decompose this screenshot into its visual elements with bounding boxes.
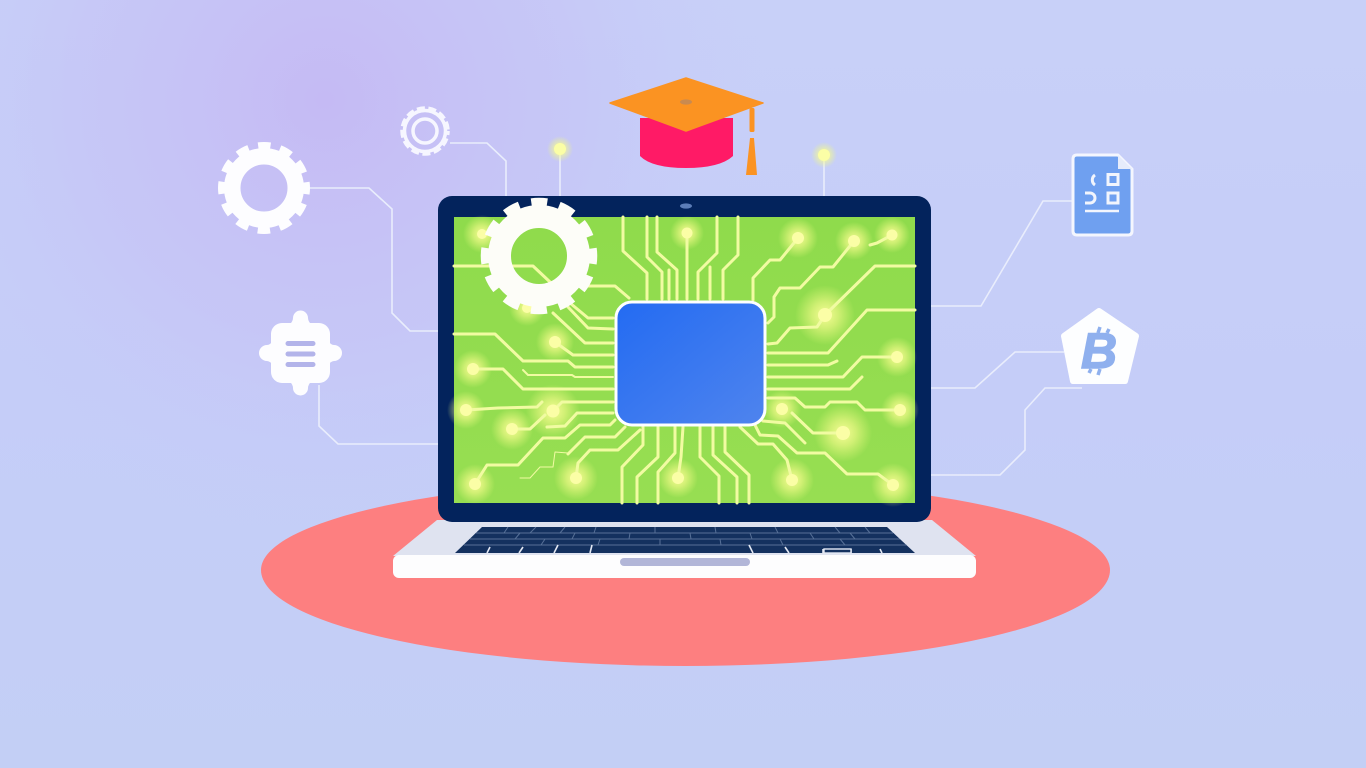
connector lines: [310, 143, 1082, 475]
screen: [454, 217, 915, 503]
icon: document: [1073, 155, 1132, 235]
icon: small outlined gear: [402, 108, 448, 154]
trackpad: [620, 558, 750, 566]
icon: large gear on screen: [485, 202, 593, 310]
bitcoin letter: B: [1081, 323, 1117, 379]
circuit nodes: [460, 143, 906, 491]
bitcoin ticks: [1089, 327, 1109, 375]
icon: puzzle piece with lines: [259, 310, 342, 396]
keyboard: [455, 527, 915, 553]
screen bezel: [438, 196, 931, 522]
central processor chip: [616, 302, 765, 425]
icon: bitcoin pentagon: [1064, 311, 1136, 381]
circuit traces: [454, 217, 915, 503]
laptop: [393, 196, 976, 578]
icon: graduation cap: [610, 78, 763, 175]
circuit glows: [447, 136, 919, 507]
laptop base: [393, 555, 976, 578]
webcam: [680, 203, 692, 209]
laptop deck: [393, 520, 976, 556]
coral platform ellipse: [261, 479, 1110, 666]
icon: white gear left: [221, 145, 307, 231]
